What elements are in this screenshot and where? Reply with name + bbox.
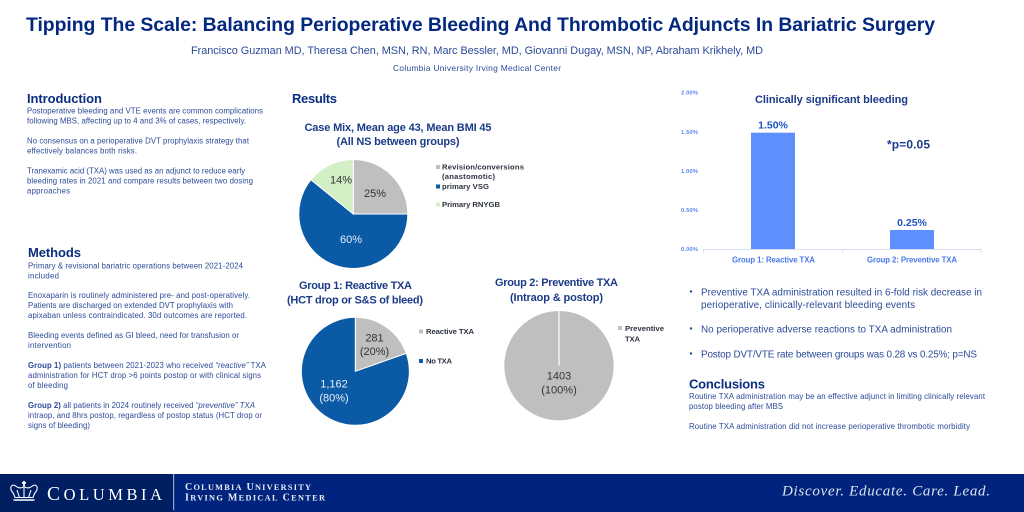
chart title: group 2: Group 2: Preventive TXA	[495, 277, 618, 289]
legend: case mix: primary VSG	[442, 182, 489, 191]
chart title: group 1: (HCT drop or S&S of bleed)	[287, 294, 423, 306]
text: methods body: Enoxaparin is routinely administered pre- and post-operatively.	[28, 291, 250, 300]
text: methods body: Bleeding events defined as GI bleed, need for transfusion or	[28, 331, 239, 340]
category label: group 2: Group 2: Preventive TXA	[867, 256, 957, 264]
panel: introduction	[27, 91, 263, 196]
text: conclusions body: Routine TXA administration did not increase perioperative thrombotic morbidity	[689, 422, 970, 431]
chart title: group 1: Group 1: Reactive TXA	[299, 280, 412, 292]
text: introduction body: bleeding rates in 2021 and compare results between two dosing	[27, 176, 253, 186]
bar: group 2	[890, 230, 934, 249]
legend: group 2: Preventive	[625, 324, 665, 333]
text: results bullets: perioperative, clinically-relevant bleeding events	[701, 300, 915, 311]
text: methods body: administration for HCT drop >6 points postop or with clinical signs	[28, 371, 261, 380]
value label: group 2: 0.25%	[897, 217, 928, 229]
icon: crown	[11, 481, 37, 500]
chart title: group 1	[287, 280, 423, 306]
pie chart: case mix: 14%	[330, 174, 352, 186]
heading: conclusions: Conclusions	[689, 376, 765, 392]
pie chart: group 2: 1403	[547, 370, 571, 382]
text: introduction body	[27, 106, 263, 196]
text: results bullets: Postop DVT/VTE rate between groups was 0.28 vs 0.25%; p=NS	[701, 350, 977, 360]
text: conclusions body	[689, 392, 986, 431]
pie chart: group 1: 1,162	[320, 378, 348, 390]
axis labels	[681, 91, 698, 253]
pie chart: case mix	[299, 159, 408, 268]
text: conclusions body: postop bleeding after MBS	[689, 402, 783, 411]
axis labels: 1.00%	[681, 169, 698, 175]
text: methods body: apixaban unless contraindicated. 30d outcomes are reported.	[28, 311, 247, 320]
legend: case mix: Primary RNYGB	[442, 200, 500, 209]
pie chart: group 1: (80%)	[319, 392, 349, 404]
logo text: Columbia University Irving Medical Center: COLUMBIA UNIVERSITY	[185, 482, 311, 493]
logo wordmark: Columbia: COLUMBIA	[47, 484, 162, 505]
text: conclusions body: Routine TXA administration may be an effective adjunct in limiting clinically relevant	[689, 392, 986, 401]
footer band	[0, 474, 1024, 512]
axis labels: 0.50%	[681, 208, 698, 214]
text: methods body: Patients are discharged on extended DVT prophylaxis with	[28, 301, 233, 310]
heading: results: Results	[292, 91, 337, 106]
pie chart: group 2	[504, 311, 614, 420]
axis labels: 1.50%	[681, 130, 698, 136]
chart title: case mix: (All NS between groups)	[336, 136, 460, 148]
text: introduction body: effectively balances both risks.	[27, 146, 137, 156]
text: methods body: included	[28, 272, 59, 280]
category label: group 1: Group 1: Reactive TXA	[732, 256, 815, 264]
logo text: Columbia University Irving Medical Center	[185, 482, 326, 504]
text: methods body: signs of bleeding)	[28, 421, 90, 430]
tagline: Discover. Educate. Care. Lead.	[781, 484, 990, 500]
heading: methods: Methods	[28, 245, 81, 260]
legend: case mix: (anastomotic)	[442, 172, 495, 181]
text: methods body	[28, 262, 267, 430]
authors: Francisco Guzman MD, Theresa Chen, MSN, RN, Marc Bessler, MD, Giovanni Dugay, MSN, NP, Abraham Krikhely, MD	[191, 45, 763, 57]
text: introduction body: Tranexamic acid (TXA) was used as an adjunct to reduce early	[27, 166, 245, 176]
pie chart: group 1: 281	[365, 332, 384, 344]
legend: group 2: TXA	[625, 334, 640, 344]
affiliation: Columbia University Irving Medical Center	[393, 63, 561, 73]
text: methods body: Primary & revisional bariatric operations between 2021-2024	[28, 262, 244, 270]
text: introduction body: Postoperative bleeding and VTE events are common complications	[27, 106, 263, 116]
text: methods body: of bleeding	[28, 381, 68, 390]
bar: group 1	[751, 133, 795, 249]
legend: group 1	[419, 327, 474, 366]
axis labels: 2.00%	[681, 91, 698, 97]
pie chart: group 1: (20%)	[360, 346, 389, 358]
legend: group 2	[618, 324, 665, 344]
chart title: case mix	[304, 122, 492, 148]
text: methods body: Group 2) all patients in 2024 routinely received “preventive” TXA	[28, 401, 255, 410]
text: results bullets: Preventive TXA administration resulted in 6-fold risk decrease in	[701, 288, 982, 298]
text: introduction body: No consensus on a perioperative DVT prophylaxis strategy that	[27, 136, 250, 146]
chart title: group 2	[495, 277, 618, 304]
pie chart: case mix: 60%	[340, 234, 362, 246]
annotation: p value: *p=0.05	[887, 138, 930, 152]
text: methods body: intervention	[28, 341, 71, 350]
chart title: clinically significant bleeding: Clinically significant bleeding	[755, 94, 908, 106]
legend: group 1: No TXA	[426, 356, 452, 366]
value label: group 1: 1.50%	[758, 120, 789, 132]
text: introduction body: following MBS, affecting up to 4 and 3% of cases, respectively.	[27, 116, 246, 126]
chart title: group 2: (Intraop & postop)	[510, 292, 603, 304]
legend: group 1: Reactive TXA	[426, 327, 474, 336]
chart title: case mix: Case Mix, Mean age 43, Mean BMI 45	[304, 122, 492, 134]
bar chart: clinically significant bleeding	[681, 91, 981, 264]
pie chart: group 1	[301, 317, 409, 425]
text: methods body: Group 1) patients between 2021-2023 who received “reactive” TXA	[28, 361, 267, 370]
panel: methods	[28, 245, 267, 430]
text: introduction body: approaches	[27, 186, 70, 196]
legend: case mix: Revision/conversions	[442, 162, 524, 172]
pie chart: group 2: (100%)	[541, 384, 577, 396]
axis line	[704, 250, 981, 252]
axis labels: 0.00%	[681, 247, 698, 253]
legend: case mix	[436, 162, 524, 209]
text: methods body: intraop, and 8hrs postop, regardless of postop status (HCT drop or	[28, 411, 262, 420]
title: Tipping The Scale: Balancing Perioperative Bleeding And Thrombotic Adjuncts In Bariatric Surgery	[26, 14, 935, 36]
text: results bullets	[690, 288, 982, 360]
logo text: Columbia University Irving Medical Center: IRVING MEDICAL CENTER	[185, 492, 326, 504]
pie chart: case mix: 25%	[364, 188, 386, 200]
panel: conclusions	[689, 376, 986, 431]
heading: introduction: Introduction	[27, 91, 102, 106]
text: results bullets: No perioperative adverse reactions to TXA administration	[701, 324, 952, 336]
